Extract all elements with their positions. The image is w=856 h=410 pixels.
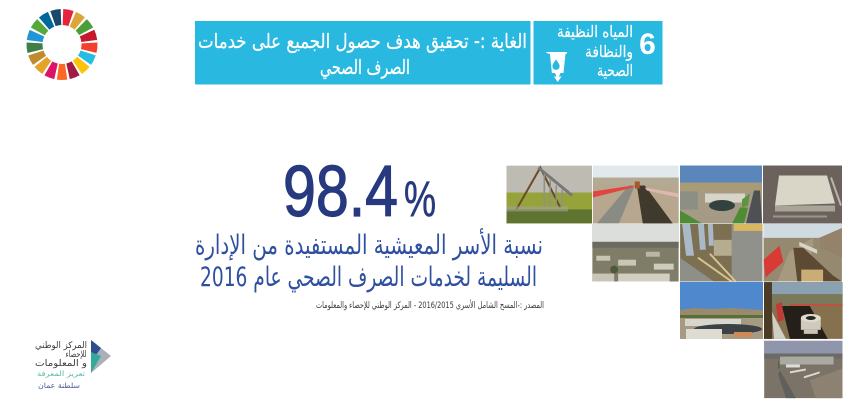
logo mark bbox=[91, 340, 111, 373]
main statistic: % bbox=[404, 171, 436, 227]
photo: wastewater treatment plant bbox=[680, 166, 762, 224]
photo: manhole ring in excavation bbox=[764, 282, 843, 339]
main statistic: 98.4 bbox=[283, 152, 398, 232]
photo: treatment tanks under blue sky bbox=[680, 282, 763, 339]
photo: sewer trench works bbox=[592, 166, 679, 224]
logo name: المركز الوطني bbox=[35, 341, 87, 351]
logo name: للإحصاء bbox=[66, 350, 86, 360]
photo: aerial view of city bbox=[592, 224, 679, 282]
heading: target text bbox=[198, 29, 527, 80]
panel: target statement bbox=[195, 21, 530, 84]
logo name: و المعلومات bbox=[35, 359, 87, 369]
description text bbox=[195, 227, 543, 293]
photo: trench with red barriers bbox=[764, 224, 842, 282]
logo name bbox=[35, 341, 87, 369]
source note: المصدر :-المسح الشامل الأسري 2016/2015 - المركز الوطني للإحصاء والمعلومات bbox=[316, 299, 544, 311]
goal title: المياه النظيفة bbox=[557, 22, 633, 41]
icon: water glass with drop bbox=[546, 52, 567, 82]
goal title bbox=[557, 22, 633, 80]
goal title: والنظافة bbox=[585, 42, 633, 62]
photo: irrigation pivot over field bbox=[506, 166, 592, 224]
logo: national centre for statistics and information bbox=[35, 340, 111, 390]
photo: aerial view of treatment facility bbox=[763, 166, 842, 224]
logo tagline: تعزيز المعرفة bbox=[37, 370, 85, 378]
heading: target text: الغاية :- تحقيق هدف حصول الجميع على خدمات bbox=[198, 29, 527, 53]
panel: goal 6 bbox=[534, 21, 662, 84]
photo: pipe gallery interior bbox=[680, 224, 762, 282]
logo country: سلطنة عمان bbox=[38, 381, 80, 390]
goal title: الصحية bbox=[597, 61, 633, 80]
goal number: 6 bbox=[639, 28, 656, 61]
icon: SDG colour wheel bbox=[23, 6, 101, 83]
photo: aerial view of plant in desert bbox=[764, 340, 842, 398]
description text: نسبة الأسر المعيشية المستفيدة من الإدارة bbox=[195, 227, 543, 261]
heading: target text: الصرف الصحي bbox=[320, 55, 410, 80]
description text: السليمة لخدمات الصرف الصحي عام 2016 bbox=[200, 262, 537, 293]
